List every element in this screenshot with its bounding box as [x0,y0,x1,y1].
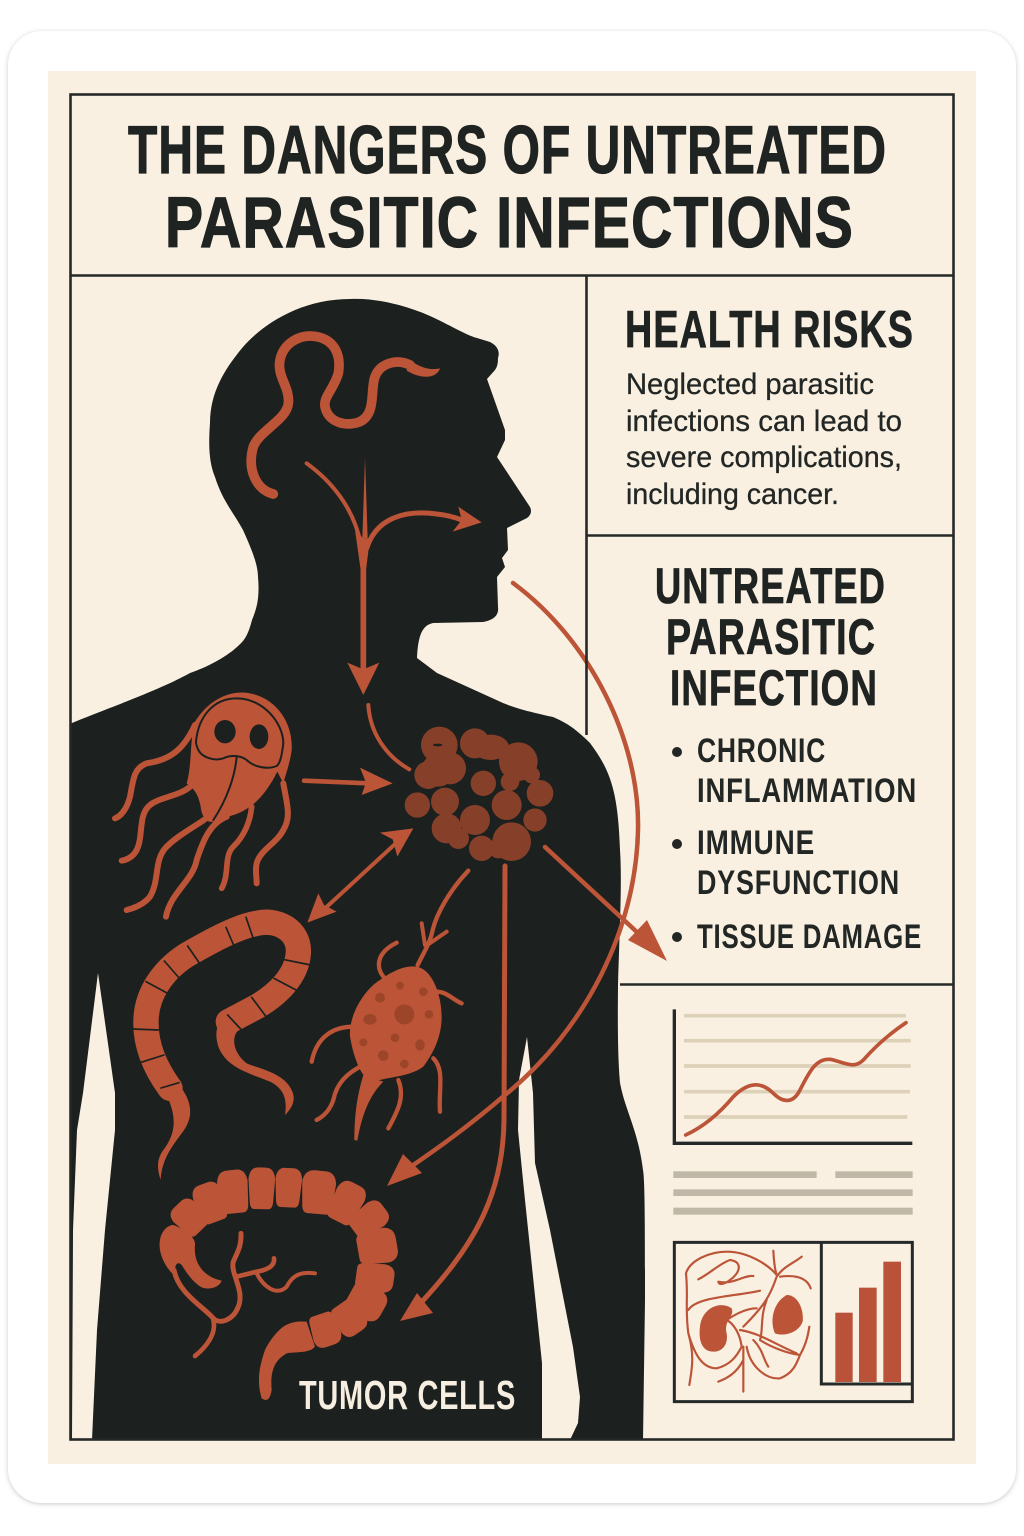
bullet list: INFLAMMATION [697,772,917,810]
bullet list [672,732,922,956]
arrow: chin to abdomen [387,583,638,1186]
body text: severe complications, [626,441,902,474]
intestine [160,1167,400,1400]
heading: PARASITIC [666,609,876,665]
grid frame [70,94,954,1440]
title: PARASITIC INFECTIONS [165,184,854,263]
heading: INFECTION [670,660,878,716]
long vertical arrow [400,866,505,1321]
title [128,112,887,263]
intestine lower tail [259,1321,315,1400]
bar chart [835,1262,901,1382]
intestine segments [167,1167,400,1350]
bullet list: TISSUE DAMAGE [697,918,922,956]
segmented worm [133,917,311,1180]
mite parasite [312,943,462,1141]
giardia [115,693,292,917]
gap: left arm [72,973,115,1440]
arrow: tumor to tissue [542,844,638,933]
head parasites and arrows [251,336,482,695]
line chart [674,1009,912,1143]
illustration box [674,1242,912,1402]
arrowhead: tissue damage [628,920,667,961]
organ illustration [686,1251,811,1392]
body text: including cancer. [626,478,839,511]
heading [655,558,886,716]
arrow: throat to tumor [368,705,409,769]
body text: Neglected parasitic [626,368,874,401]
placeholder text bars [673,1171,913,1215]
arrow into mite [418,871,468,965]
arrow: giardia to tumor [304,768,393,795]
double arrow [307,828,413,923]
intestine branching end [160,1225,315,1356]
gap: right arm [518,1037,580,1440]
silhouette [70,299,645,1440]
body text [626,368,902,511]
tumor cluster [405,727,553,861]
panel: health risks [625,301,914,511]
bullet list: DYSFUNCTION [697,864,900,902]
body text: infections can lead to [626,405,902,438]
panel: charts [673,1009,913,1402]
giardia parasite, tumor and arrows [115,693,553,1180]
label: tumor cells: TUMOR CELLS [299,1372,516,1418]
heading: UNTREATED [655,558,886,614]
bullet list: CHRONIC [697,732,826,770]
panel: untreated parasitic infection [655,558,922,956]
panel: human silhouette with parasites [70,299,667,1440]
branching arrow in head [307,458,482,695]
brain worm [251,336,440,494]
bullet list: IMMUNE [697,824,815,862]
heading: health risks: HEALTH RISKS [625,301,914,359]
